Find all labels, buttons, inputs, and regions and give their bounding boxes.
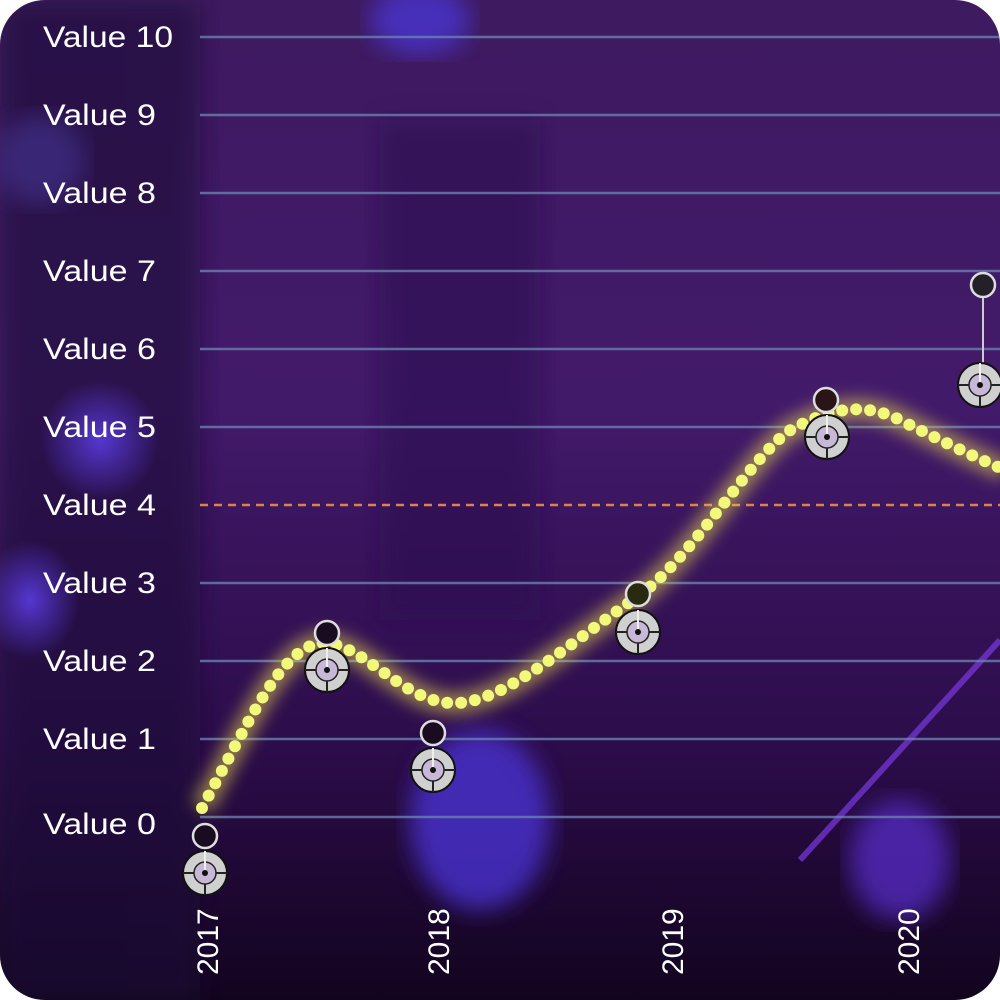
y-axis labels: Value 0 bbox=[43, 808, 156, 841]
y-axis labels: Value 8 bbox=[43, 177, 156, 210]
y-axis labels: Value 10 bbox=[43, 21, 173, 54]
x-axis labels: 2019 bbox=[657, 908, 690, 975]
y-axis labels: Value 4 bbox=[43, 489, 156, 522]
y-axis labels: Value 5 bbox=[43, 411, 156, 444]
markers bbox=[183, 273, 1000, 895]
threshold line value 4 bbox=[200, 504, 1000, 506]
x-axis labels bbox=[192, 908, 926, 975]
line series bbox=[202, 409, 1000, 808]
y-axis labels: Value 1 bbox=[43, 723, 156, 756]
y-axis labels: Value 7 bbox=[43, 255, 156, 288]
y-axis labels: Value 6 bbox=[43, 333, 156, 366]
y-axis labels bbox=[43, 21, 173, 841]
y-axis labels: Value 9 bbox=[43, 99, 156, 132]
x-axis labels: 2018 bbox=[423, 908, 456, 975]
x-axis labels: 2020 bbox=[893, 908, 926, 975]
grid lines bbox=[200, 37, 1000, 817]
x-axis labels: 2017 bbox=[192, 908, 225, 975]
y-axis labels: Value 2 bbox=[43, 645, 156, 678]
y-axis labels: Value 3 bbox=[43, 567, 156, 600]
